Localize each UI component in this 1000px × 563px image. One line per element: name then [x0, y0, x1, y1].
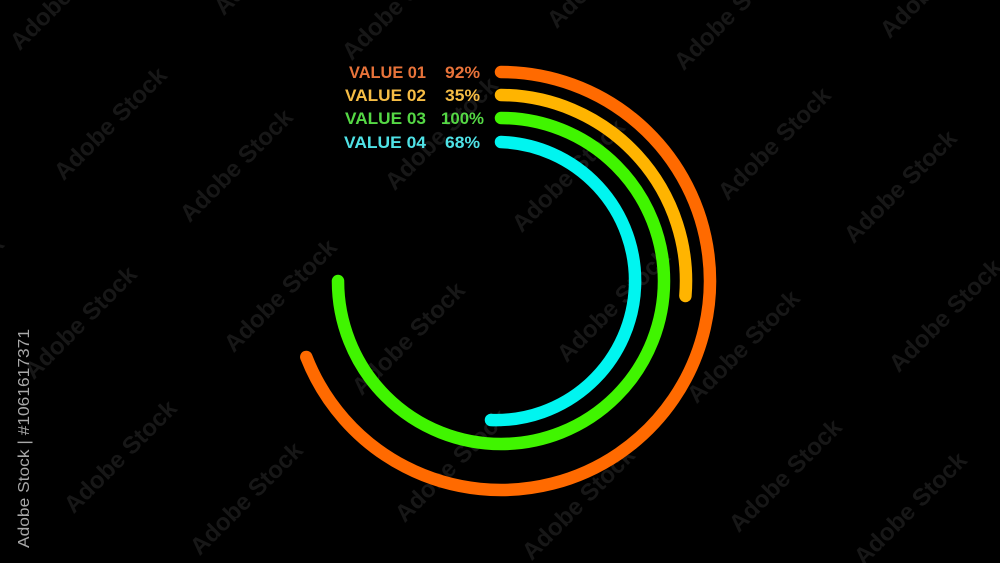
watermark pattern: Adobe Stock	[19, 260, 143, 385]
watermark pattern: Adobe Stock	[347, 276, 471, 401]
legend row: value 01	[349, 64, 480, 82]
watermark pattern: Adobe Stock	[49, 61, 173, 186]
legend row: value 02: 35%	[445, 87, 480, 105]
arc: value 03 100%	[338, 118, 664, 444]
watermark pattern: Adobe Stock	[59, 394, 183, 519]
legend row: value 02: VALUE 02	[345, 87, 426, 105]
legend labels	[344, 64, 484, 152]
legend row: value 02	[345, 87, 480, 105]
watermark pattern: Adobe Stock	[185, 436, 309, 561]
legend row: value 01: VALUE 01	[349, 64, 426, 82]
legend row: value 03: VALUE 03	[345, 110, 426, 128]
legend row: value 03: 100%	[441, 110, 484, 128]
watermark pattern: Adobe Stock	[175, 103, 299, 228]
watermark pattern: Adobe Stock	[552, 243, 676, 368]
watermark pattern: Adobe Stock	[507, 113, 631, 238]
watermark pattern: Adobe Stock	[517, 441, 641, 563]
arc: value 02 35%	[501, 95, 686, 296]
legend row: value 01: 92%	[445, 64, 480, 82]
watermark pattern: Adobe Stock	[390, 403, 514, 528]
radial progress chart	[306, 72, 710, 490]
watermark pattern: Adobe Stock	[219, 233, 343, 358]
arc: value 04 68%	[491, 142, 635, 420]
watermark pattern: Adobe Stock	[682, 284, 806, 409]
legend row: value 04: VALUE 04	[344, 134, 427, 152]
legend row: value 04: 68%	[445, 134, 480, 152]
stock id text: Adobe Stock | #1061617371	[16, 329, 33, 548]
legend row: value 04	[344, 134, 480, 152]
watermark pattern: Adobe Stock	[380, 71, 504, 196]
arc: value 01 92%	[306, 72, 710, 490]
watermark pattern: Adobe Stock	[839, 124, 963, 249]
legend row: value 03	[345, 110, 484, 128]
watermark pattern: Adobe Stock	[724, 413, 848, 538]
watermark pattern: Adobe Stock	[713, 81, 837, 206]
